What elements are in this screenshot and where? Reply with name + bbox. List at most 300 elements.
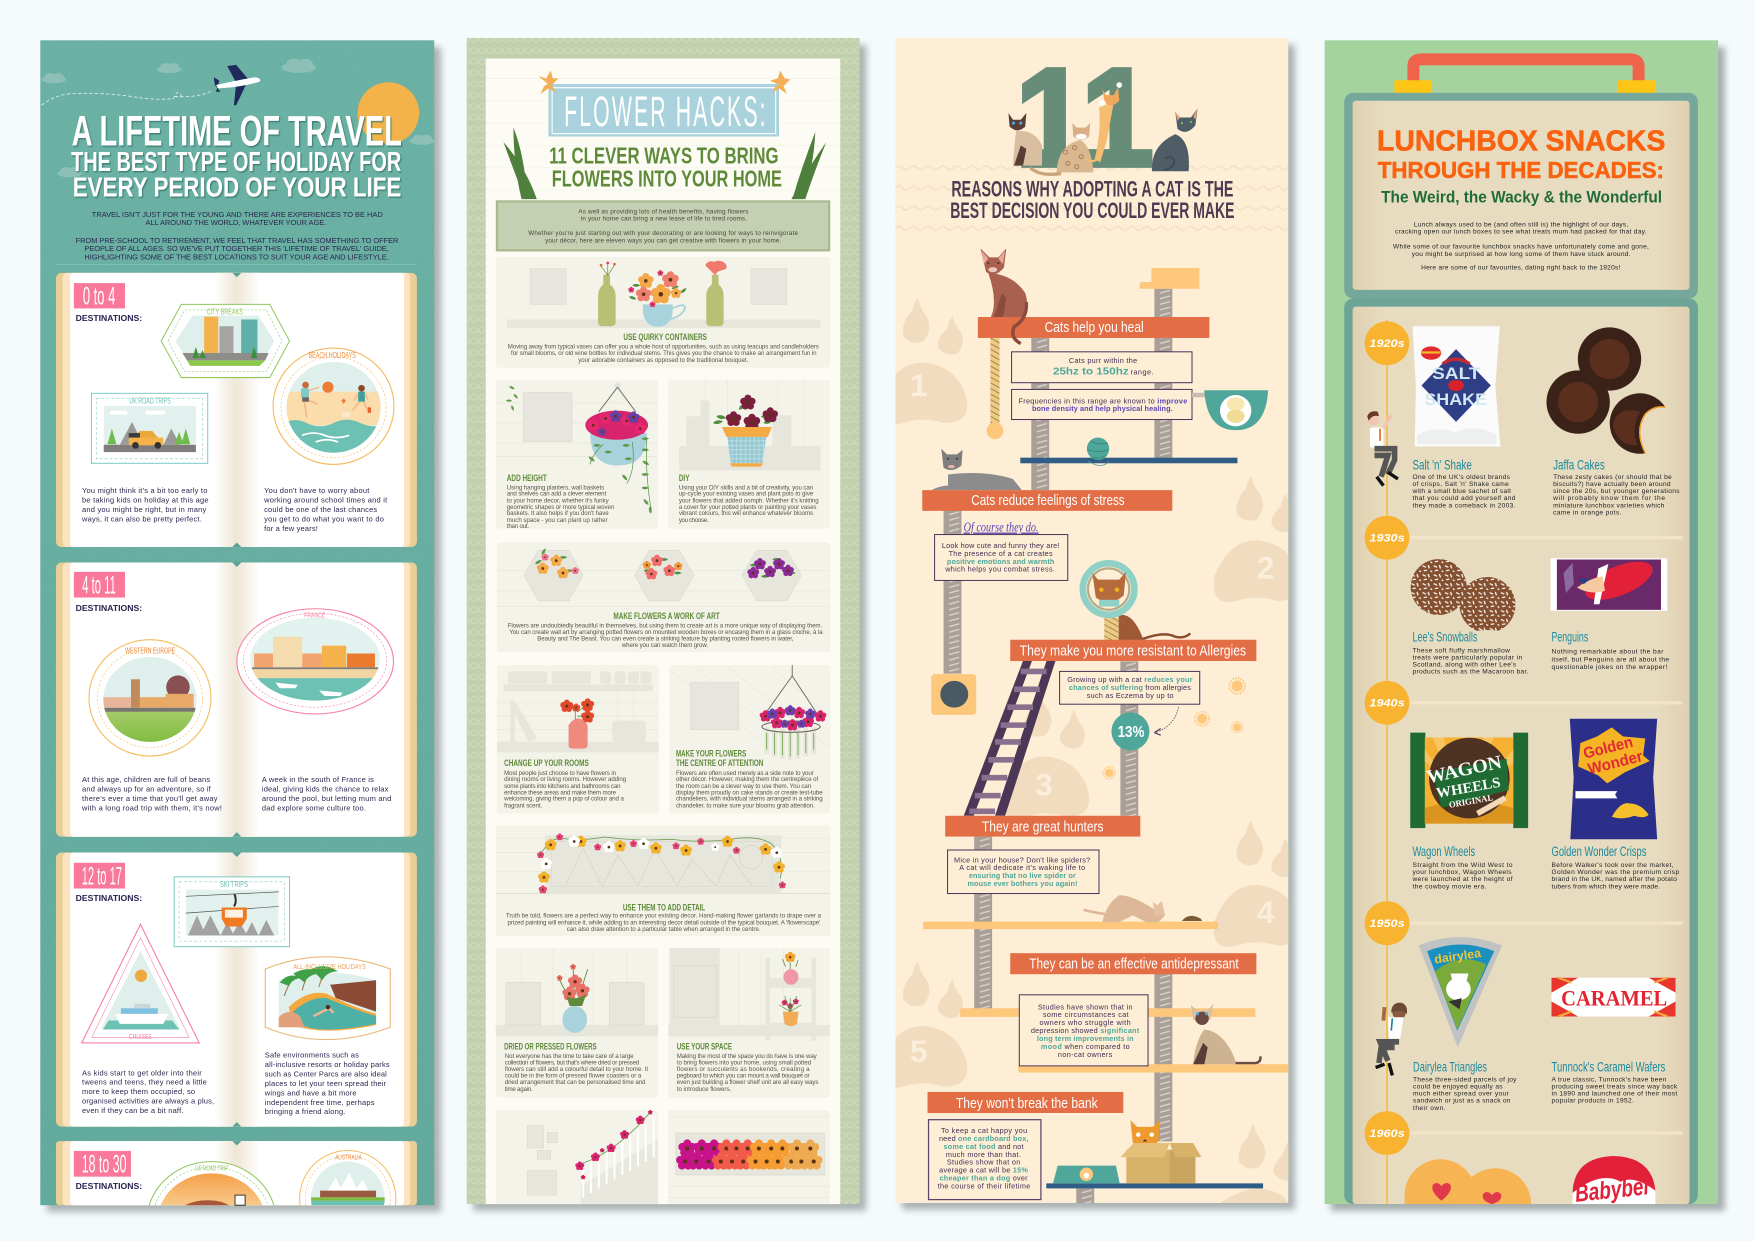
top perch <box>1140 268 1199 289</box>
text: where you can watch them grow. <box>621 642 708 649</box>
icon: hanging basket <box>585 382 652 514</box>
snack: jaffa cakes text: came in orange pots. <box>1553 510 1622 517</box>
heading: DRIED OR PRESSED FLOWERS <box>504 1042 597 1053</box>
product: wagon wheels: WHEELS <box>1435 775 1502 802</box>
product: wagon wheels <box>1410 733 1528 828</box>
text: left page: with a long road trip with them, it's now! <box>81 804 222 813</box>
rope and ball <box>987 338 1003 439</box>
text: and shelves can add a clever element <box>507 491 606 498</box>
box: cat happy: To keep a cat happy you <box>941 1126 1027 1135</box>
text: Truth be told, flowers are a perfect way to enhance your existing decor. Hand-making flower garlands to drape over a <box>506 913 822 920</box>
icon: teal cat bed <box>1053 1166 1120 1183</box>
box: look how cute: positive emotions and warmth <box>947 557 1054 566</box>
allergen bursts <box>1103 678 1245 779</box>
text: Moving away from typical vases can offer you a whole host of opportunities, such as using teacups and candleholders <box>508 344 819 351</box>
product: babybel <box>1573 1156 1655 1208</box>
text: right page: could be one of the last chances <box>264 505 377 514</box>
snack: dairylea text: Dairylea Triangles <box>1413 1059 1487 1074</box>
cat: blue grey <box>1152 109 1198 171</box>
icon: vase with red flowers <box>560 698 594 749</box>
destinations heading: DESTINATIONS: <box>76 894 142 903</box>
box: look how cute: Look how cute and funny they are! <box>942 541 1059 550</box>
snack: lee's snowballs text: Lee's Snowballs <box>1413 630 1478 645</box>
icon: flower garland <box>537 833 786 893</box>
badge: 1940s <box>1365 681 1409 725</box>
shelf <box>923 922 1218 929</box>
banner: allergies: They make you more resistant to Allergies <box>1020 644 1246 660</box>
product: wagon wheels: ORIGINAL <box>1448 792 1494 810</box>
snack: tunnock's text: Tunnock's Caramel Wafers <box>1552 1059 1666 1074</box>
text: left page: tweens and teens, they need a little <box>82 1077 207 1086</box>
title: BEST DECISION YOU COULD EVER MAKE <box>950 198 1235 223</box>
icon: hanging food bowl <box>1192 390 1268 430</box>
box: cat happy: average a cat will be 15% <box>939 1166 1028 1175</box>
text: geometric shapes or more typical woven <box>507 504 615 511</box>
destinations heading: DESTINATIONS: <box>76 604 142 613</box>
badge: us road trip <box>149 1162 274 1205</box>
cat: scratching in cone <box>1083 563 1190 640</box>
icon: plane <box>214 65 260 105</box>
text: right page: places to let your teen spread their <box>265 1079 387 1088</box>
text: left page: organised activities are always a plus, <box>82 1096 214 1105</box>
heading: USE QUIRKY CONTAINERS <box>623 332 707 343</box>
intro text: ALL AROUND THE WORLD, WHATEVER YOUR AGE. <box>146 218 326 227</box>
heading: THE CENTRE OF ATTENTION <box>676 758 763 769</box>
text: right page: ideal, giving kids the chance to relax <box>262 784 389 793</box>
snack: salt n shake text <box>1412 457 1516 510</box>
handle clasps <box>1394 80 1655 93</box>
card: make your flowers the centre of attention <box>669 665 830 814</box>
heading: DIY <box>679 473 690 484</box>
box: studies: some circumstances cat <box>1043 1010 1129 1019</box>
box: cats purr: 25hz to 150hz <box>1053 366 1129 377</box>
badge: cruises: CRUISES <box>129 1032 152 1041</box>
text: display them proudly on cake stands or create test-tube <box>676 790 823 797</box>
product: golden wonder crisps: Wonder <box>1586 748 1645 778</box>
cat tree posts <box>944 289 1172 1204</box>
intro box: in your home can bring a new lease of life to tired rooms. <box>581 215 747 222</box>
shelf <box>960 1008 1255 1017</box>
subtitle <box>549 142 782 192</box>
icon: small vine <box>506 385 519 411</box>
book: 12 to 17: 12 to 17 <box>82 864 122 891</box>
card: dried or pressed flowers <box>496 948 658 1098</box>
text: left page: be taking kids on holiday at this age <box>82 495 209 504</box>
icon: orange pot with flowers <box>779 996 801 1026</box>
badge: 1930s: 1930s <box>1369 533 1405 545</box>
text: to bring flowers into your home, using small potted <box>677 1060 812 1067</box>
cat: leopard <box>1030 123 1094 174</box>
text: other décor. However, making them the centrepiece of <box>676 776 818 783</box>
book pages <box>56 852 417 1127</box>
text: vibrant colours, this will enhance whatever blooms <box>679 510 813 517</box>
text: your adorable containers as opposed to the traditional bouquet. <box>578 357 749 364</box>
text: right page: bringing a friend along. <box>265 1107 345 1116</box>
icon: climbing woman <box>1376 1003 1407 1075</box>
badge: uk road trips <box>91 393 208 463</box>
icon: small flowers <box>600 262 616 275</box>
book: 12 to 17 <box>56 852 417 1127</box>
badge: 1950s: 1950s <box>1369 918 1405 930</box>
box: cat happy <box>929 1120 1041 1200</box>
banner: antidepressant: They can be an effective antidepressant <box>1029 957 1239 973</box>
badge: uk road trips: UK ROAD TRIPS <box>129 396 171 405</box>
age label <box>74 1151 131 1179</box>
snack: salt n shake text: with a small blue sachet of salt <box>1412 488 1511 495</box>
text: right page: you get to do what you want to do <box>264 514 384 523</box>
grass <box>503 127 826 199</box>
platform with hole <box>931 674 976 715</box>
banner: cats reduce feelings of stress: Cats reduce feelings of stress <box>971 493 1125 509</box>
text: Flowers are often used merely as a side note to your <box>676 770 814 777</box>
box: studies: Studies have shown that in <box>1038 1002 1133 1011</box>
text: time again. <box>505 1086 533 1093</box>
cat: siamese on shelf <box>1191 1004 1260 1064</box>
panel background <box>895 38 1288 1203</box>
snack: tunnock's text: in 1890 and launched one of their most <box>1552 1091 1677 1098</box>
panel shadow <box>1331 47 1725 1211</box>
wall frames <box>530 269 787 304</box>
text: right page: independent free time, perhaps <box>265 1098 375 1107</box>
staircase <box>581 1139 658 1204</box>
text: Making the most of the space you do have is one way <box>677 1053 818 1060</box>
snack: salt n shake text: they made a comeback in 2003. <box>1413 503 1516 510</box>
badge: 1950s <box>1365 901 1409 945</box>
snack: wagon wheels text: the cowboy movie era. <box>1413 884 1487 891</box>
text: left page: and always up for an adventure, so if <box>82 784 212 793</box>
banner: great hunters: They are great hunters <box>982 819 1104 835</box>
card: flower planter <box>668 1110 830 1204</box>
subtitle: 11 CLEVER WAYS TO BRING <box>549 142 779 168</box>
snack: lee's snowballs text <box>1413 630 1529 675</box>
text: your flowers that added oomph. Whether it's knitting <box>679 497 819 504</box>
heading: USE YOUR SPACE <box>677 1042 732 1053</box>
text: for small blooms, or old wine bottles for individual stems. This gives you the chance to make an arrangement fun in <box>511 350 817 357</box>
badge: 1920s <box>1365 321 1409 365</box>
text: even just building a flower shelf unit are all easy ways <box>677 1079 819 1086</box>
banner: cats help you heal: Cats help you heal <box>1045 320 1144 336</box>
book pages <box>56 273 417 547</box>
cat tail <box>1013 302 1026 344</box>
icon: poppy <box>705 261 727 275</box>
box: studies: depression showed significant <box>1031 1026 1140 1035</box>
box: mice: mouse ever bothers you again! <box>967 879 1078 888</box>
snack: dairylea text: their own. <box>1413 1105 1446 1112</box>
text: welcoming, giving them a pop of colour and a <box>503 796 624 803</box>
text: right page: wings and have a bit more <box>264 1089 357 1098</box>
product: salt n shake bag: SHAKE <box>1424 390 1487 409</box>
panel: flower hacks <box>467 38 866 1211</box>
destinations heading: DESTINATIONS: <box>76 314 142 323</box>
badge: ski trips: SKI TRIPS <box>220 880 248 889</box>
text: left page: As kids start to get older into their <box>82 1068 202 1077</box>
title <box>951 181 1234 218</box>
box: look how cute <box>935 535 1068 580</box>
cat: stalking <box>1083 895 1165 922</box>
title: REASONS WHY ADOPTING A CAT IS THE <box>951 177 1233 202</box>
text: right page: for a few years! <box>264 524 318 533</box>
intro text <box>76 210 399 261</box>
wall frame <box>523 393 572 442</box>
badge: all-inclusive holidays: ALL-INCLUSIVE HOLIDAYS <box>293 962 366 971</box>
icon: red flowers <box>643 555 682 579</box>
hexagon planters <box>524 550 801 601</box>
text: left page <box>81 486 209 523</box>
text: Most people just choose to have flowers in <box>504 770 617 777</box>
text: left page: At this age, children are full of beans <box>82 775 210 784</box>
product: dairylea triangle: dairylea <box>1433 946 1482 966</box>
text: left page: You might think it's a bit too early to <box>82 486 207 495</box>
intro text <box>1393 221 1649 272</box>
ladder <box>964 661 1055 816</box>
badge: city breaks <box>161 304 290 378</box>
cat: grey lying <box>931 449 1022 490</box>
box: frequencies <box>1012 389 1192 420</box>
lunchbox handle <box>1413 59 1639 82</box>
banner: cats help you heal <box>978 317 1209 338</box>
icon: vase with dried flowers <box>557 964 590 1033</box>
shelf with books <box>679 401 820 471</box>
box: cats purr: Cats purr within the <box>1069 356 1137 365</box>
icon: teacup bouquet <box>628 270 687 327</box>
box: studies: non-cat owners <box>1058 1050 1113 1059</box>
clouds <box>41 59 434 177</box>
box: look how cute: which helps you combat stress. <box>944 565 1055 574</box>
icon: vases <box>598 275 724 326</box>
banner: won't break the bank: They won't break the bank <box>956 1096 1098 1112</box>
snack: wagon wheels text: Straight from the Wild West to <box>1413 862 1513 869</box>
box: frequencies: Frequencies in this range are known to improve <box>1019 396 1187 405</box>
box: growing up with a cat: such as Eczema by up to <box>1087 691 1174 700</box>
box: mice <box>948 850 1099 894</box>
card: diy <box>668 380 830 529</box>
snack: dairylea text: could be enjoyed equally as <box>1413 1083 1503 1090</box>
badge: australia <box>300 1151 396 1205</box>
book pages <box>56 1141 417 1205</box>
destinations heading: DESTINATIONS: <box>76 1182 142 1191</box>
badge: us road trip: US ROAD TRIP <box>195 1164 228 1173</box>
badge: 1960s <box>1365 1111 1409 1155</box>
snack: tunnock's text: producing sweet treats since way back <box>1552 1083 1678 1090</box>
panel: lunchbox snacks <box>1325 40 1725 1211</box>
panel background <box>1325 40 1718 1204</box>
box: cat happy: some cat food and not <box>944 1142 1024 1151</box>
snack: lee's snowballs text: treats were particularly popular in <box>1413 654 1523 661</box>
text: than out. <box>507 523 529 530</box>
panel border <box>467 38 860 1204</box>
intro text: Lunch always used to be (and often still is) the highlight of our days, <box>1414 221 1628 228</box>
text: right page: working around school times and it <box>263 495 388 504</box>
text: chandeliers, with individual stems arranged in a striking <box>676 796 823 803</box>
intro text: you might be surprised at how long some of them have stuck around. <box>1412 251 1631 258</box>
product: golden wonder crisps: Golden <box>1582 734 1635 763</box>
card: make flowers a work of art <box>497 542 830 652</box>
text: right page <box>262 775 391 813</box>
text: Beauty and The Beast. You can even create a striking feature by planting rooted flowers in water, <box>537 636 794 643</box>
panel: 11 reasons to adopt a cat <box>880 38 1301 1210</box>
text: fragrant scent. <box>504 802 542 809</box>
decade dividers <box>1410 536 1682 1135</box>
paw numbers: 1 <box>910 368 927 403</box>
callout: of course they do: Of course they do. <box>964 520 1039 535</box>
kitchen shelf <box>497 671 659 752</box>
product: lee's snowballs <box>1411 559 1515 637</box>
snack: lee's snowballs text: products such as the Macaroon bar. <box>1413 668 1529 675</box>
navy shelf <box>1020 458 1237 463</box>
snack: golden wonder text: Before Walker's took over the market, <box>1552 862 1674 869</box>
card: use quirky containers <box>496 257 830 368</box>
box: cat happy: Studies show that on <box>947 1158 1020 1167</box>
intro text: HIGHLIGHTING SOME OF THE BEST LOCATIONS TO SUIT YOUR AGE AND LIFESTYLE. <box>84 252 389 261</box>
banner: allergies <box>1010 640 1256 661</box>
snack: penguins text: questionable jokes on the wrapper! <box>1552 664 1667 671</box>
badge: 1940s: 1940s <box>1369 698 1405 710</box>
text: enhance these areas and make them more <box>504 790 617 797</box>
paw numbers: 2 <box>1257 551 1274 586</box>
text: dining rooms or living rooms. However adding <box>504 776 627 783</box>
planter box <box>676 1133 824 1175</box>
icon: purple flowers <box>747 558 796 578</box>
text: dried arrangement that can be personalised time and <box>505 1079 646 1086</box>
banner: great hunters <box>945 816 1140 837</box>
badge: beach holidays: BEACH HOLIDAYS <box>308 351 356 360</box>
text: prized painting will enhance it, while adding to an interesting decor detail outside of the typical bouquet. A 'flowerscape' <box>507 919 820 926</box>
snack: golden wonder text: Golden Wonder Crisps <box>1552 844 1647 859</box>
product: salt n shake bag: SALT <box>1432 364 1481 383</box>
age label: 18 to 30 <box>82 1152 126 1179</box>
icon: flower garland <box>575 1110 653 1179</box>
box: mice: ensuring that no live spider or <box>969 871 1076 880</box>
snack: penguins text: Nothing remarkable about the bar <box>1552 649 1664 656</box>
shelf <box>507 319 820 328</box>
age label <box>74 283 125 310</box>
text: left page: there's ever a time that you'll get away <box>82 794 218 803</box>
text: the room can be a clever way to use them. You can <box>676 783 812 790</box>
text: flowers or succulents as bookends, creating a <box>677 1066 810 1073</box>
box: growing up with a cat <box>1060 671 1200 704</box>
text: Using hanging planters, wall baskets <box>507 484 604 491</box>
badge: 1930s <box>1365 516 1409 560</box>
shelf <box>1018 1064 1289 1073</box>
snack: golden wonder text: tubers from which they were made. <box>1552 884 1660 891</box>
text: left page: even if they can be a bit naff. <box>82 1106 183 1115</box>
snack: jaffa cakes text: miniature lunchbox varieties which <box>1553 503 1665 510</box>
age label: 4 to 11 <box>82 573 116 600</box>
badge: beach holidays <box>273 348 394 464</box>
product: jaffa cakes <box>1546 327 1665 454</box>
intro text: While some of our favourite lunchbox snacks have unfortunately come and gone, <box>1393 244 1649 251</box>
panel shadow <box>47 47 441 1212</box>
text: right page <box>264 1050 390 1116</box>
age label <box>74 863 125 891</box>
box: cats purr: range. <box>1130 367 1154 376</box>
snack: penguins text <box>1552 630 1669 671</box>
text: some plants into kitchens and bathrooms can <box>504 783 621 790</box>
icon: cardboard box <box>1120 1143 1201 1183</box>
title: THE BEST TYPE OF HOLIDAY FOR <box>71 146 401 177</box>
snack: jaffa cakes text: Jaffa Cakes <box>1553 457 1605 472</box>
text: flowers can still add a colourful detail to your home. It <box>505 1066 648 1073</box>
paw numbers: 5 <box>910 1034 927 1069</box>
badge: western europe <box>89 640 211 756</box>
heading <box>676 748 763 769</box>
intro box <box>497 201 829 250</box>
product: babybel: Babybel <box>1574 1173 1651 1208</box>
title box: FLOWER HACKS: <box>564 89 766 136</box>
intro box: your décor, here are eleven ways you can get creative with flowers in your home. <box>545 237 781 244</box>
snack: salt n shake text: that you could add yourself and <box>1413 495 1516 502</box>
text: collection of flowers, but that's where dried or pressed <box>505 1060 640 1067</box>
snack: jaffa cakes text: will probably know them for the <box>1552 495 1665 502</box>
snack: wagon wheels text: your lunchbox, Wagon Wheels <box>1413 869 1512 876</box>
badge: 1960s: 1960s <box>1369 1128 1405 1140</box>
text: right page: around the pool, but letting mum and <box>262 794 391 803</box>
icon: orange flowers <box>534 548 579 578</box>
box: mice: Mice in your house? Don't like spiders? <box>954 855 1090 864</box>
title <box>71 108 402 203</box>
product: wagon wheels: WAGON <box>1425 752 1504 788</box>
timeline line <box>1386 320 1388 1204</box>
cat: siamese <box>1008 113 1042 166</box>
text: Using your DIY skills and a bit of creativity, you can <box>679 484 814 491</box>
arrow <box>1154 707 1179 735</box>
text: right page: Safe environments such as <box>265 1050 359 1059</box>
snack: jaffa cakes text: since the 20s, but younger generations <box>1553 488 1680 495</box>
text: pegboard to which you can mount a wall bouquet or <box>677 1073 810 1080</box>
icon: mouse <box>1182 916 1202 921</box>
box: cat happy: much more than that. <box>946 1150 1021 1159</box>
icon: climbing man <box>1367 411 1398 486</box>
text: to introduce flowers. <box>677 1086 731 1093</box>
text: right page: A week in the south of France is <box>262 775 374 784</box>
box: growing up with a cat: chances of suffering from allergies <box>1069 683 1191 692</box>
text <box>676 770 823 809</box>
paw numbers <box>910 368 1275 1069</box>
badge: cruises <box>82 924 199 1043</box>
product: jammie biscuits <box>1405 1159 1531 1204</box>
badge: all-inclusive holidays <box>265 957 390 1040</box>
box: cat happy: need one cardboard box, <box>939 1134 1028 1143</box>
panel inner page <box>486 59 840 1204</box>
banner: antidepressant <box>1010 953 1256 974</box>
big number eleven: 11 <box>1015 39 1154 196</box>
picture frame <box>545 835 781 894</box>
counter and frames <box>496 983 658 1036</box>
product: caramel wafer <box>1552 978 1676 1017</box>
badge: 1920s: 1920s <box>1369 338 1405 350</box>
paw numbers: 4 <box>1257 895 1275 930</box>
icon: pink vase with sunflower <box>782 952 798 985</box>
card: staircase garland <box>496 1110 658 1204</box>
text: to your home decor, whether it's funky <box>507 497 610 504</box>
snack: dairylea text: sandwich or just as a snack on <box>1413 1098 1511 1105</box>
text <box>679 484 819 524</box>
text <box>508 622 823 649</box>
intro box: As well as providing lots of health benefits, having flowers <box>578 209 749 216</box>
snack: lee's snowballs text: These soft fluffy marshmallow <box>1413 647 1510 654</box>
text: a cover for your potted plants or painting your vases <box>679 504 817 511</box>
banner: won't break the bank <box>928 1092 1123 1113</box>
snack: jaffa cakes text: These zesty cakes (or should that be <box>1553 474 1672 481</box>
text: can also draw attention to a particular table when arranged in the centre. <box>567 926 761 933</box>
age label <box>74 572 125 600</box>
intro text: Here are some of our favourites, dating right back to the 1920s! <box>1421 265 1621 272</box>
snack: lee's snowballs text: Scotland, along with other Lee's <box>1413 662 1517 669</box>
product: dairylea triangle <box>1419 937 1502 1047</box>
box: growing up with a cat: Growing up with a cat reduces your <box>1067 675 1193 684</box>
intro text: PEOPLE OF ALL AGES. SO WE'VE PUT TOGETHER THIS 'LIFETIME OF TRAVEL' GUIDE, <box>84 244 389 253</box>
product: penguins <box>1551 554 1667 611</box>
